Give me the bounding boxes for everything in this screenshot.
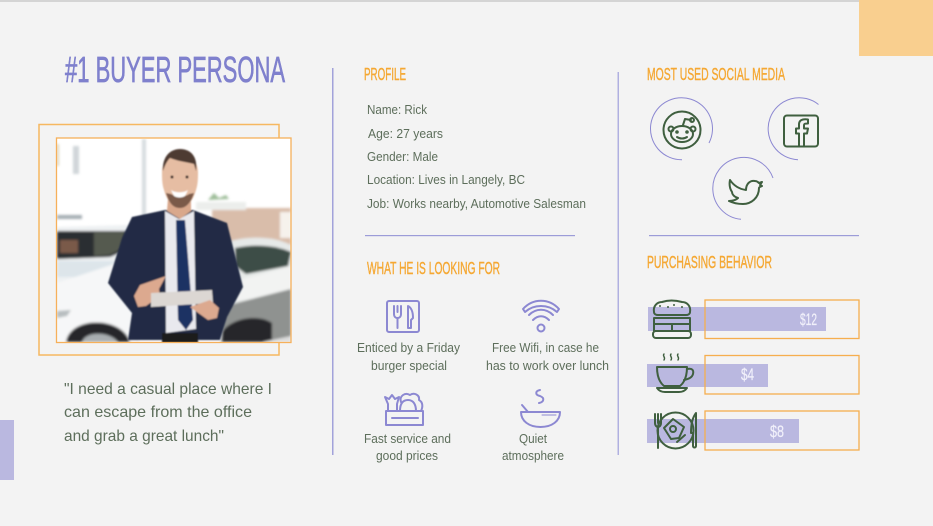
caption: has to work over lunch (486, 359, 609, 373)
neck (167, 198, 191, 219)
social: reddit (650, 98, 712, 160)
heading: profile: PROFILE (364, 64, 406, 84)
eyes (170, 176, 174, 178)
title: #1 BUYER PERSONA (65, 49, 285, 90)
item: quiet atmosphere (502, 390, 564, 463)
profile details: Name: Rick (367, 103, 428, 117)
heading: purchasing behavior: PURCHASING BEHAVIOR (647, 252, 772, 272)
shirt (165, 211, 196, 333)
icon: steaming bowl (521, 390, 560, 427)
caption (357, 341, 461, 373)
caption: Fast service and (364, 432, 451, 446)
heading: what he is looking for: WHAT HE IS LOOKING FOR (367, 258, 500, 278)
icon: coffee cup (657, 354, 693, 392)
side accent: lilac block (0, 420, 14, 480)
caption: good prices (376, 449, 438, 463)
bar: burger $12: $12 (800, 310, 817, 329)
icon: burger (653, 300, 691, 338)
photo: salesman in car showroom (56, 138, 291, 343)
tie (176, 220, 193, 330)
quote: "I need a casual place where I (64, 381, 272, 398)
suit (108, 210, 243, 340)
quote (64, 381, 272, 445)
social: facebook (768, 98, 818, 160)
photo outer frame (39, 124, 279, 355)
right car (221, 238, 291, 342)
caption (364, 432, 451, 463)
quote: and grab a great lunch" (64, 428, 224, 445)
beard (166, 193, 194, 208)
social: twitter (713, 157, 773, 219)
bar: burger $12 (648, 300, 859, 338)
hair (163, 149, 196, 171)
left car (57, 225, 127, 282)
item: burger special (357, 301, 461, 373)
icon: plate with fork and knife (655, 412, 696, 448)
caption: burger special (371, 359, 447, 373)
profile details (367, 103, 586, 211)
heading: most used social media: MOST USED SOCIAL MEDIA (647, 64, 785, 84)
caption: Free Wifi, in case he (492, 341, 599, 355)
profile details: Job: Works nearby, Automotive Salesman (367, 197, 586, 211)
profile details: Gender: Male (367, 150, 438, 164)
icon: produce crate (385, 394, 423, 425)
icon: cutlery card (387, 301, 419, 332)
icon: wifi (523, 301, 559, 332)
bar: meal $8: $8 (770, 422, 784, 441)
caption: Quiet (519, 432, 547, 446)
item: fast service (364, 394, 451, 463)
face (161, 158, 199, 201)
column divider right (618, 72, 619, 455)
caption (502, 432, 564, 463)
bar: coffee $4 (647, 354, 859, 394)
bar: meal $8 (647, 411, 859, 450)
profile details: Age: 27 years (368, 127, 443, 141)
bar: coffee $4: $4 (741, 365, 754, 384)
corner accent: orange block (859, 0, 933, 56)
column divider left (332, 68, 334, 455)
caption (486, 341, 609, 373)
caption: Enticed by a Friday (357, 341, 461, 355)
caption: atmosphere (502, 449, 564, 463)
hands and tablet (134, 276, 166, 307)
profile details: Location: Lives in Langely, BC (367, 173, 525, 187)
smile (171, 190, 188, 198)
quote: can escape from the office (64, 404, 252, 421)
item: free wifi (486, 301, 609, 373)
